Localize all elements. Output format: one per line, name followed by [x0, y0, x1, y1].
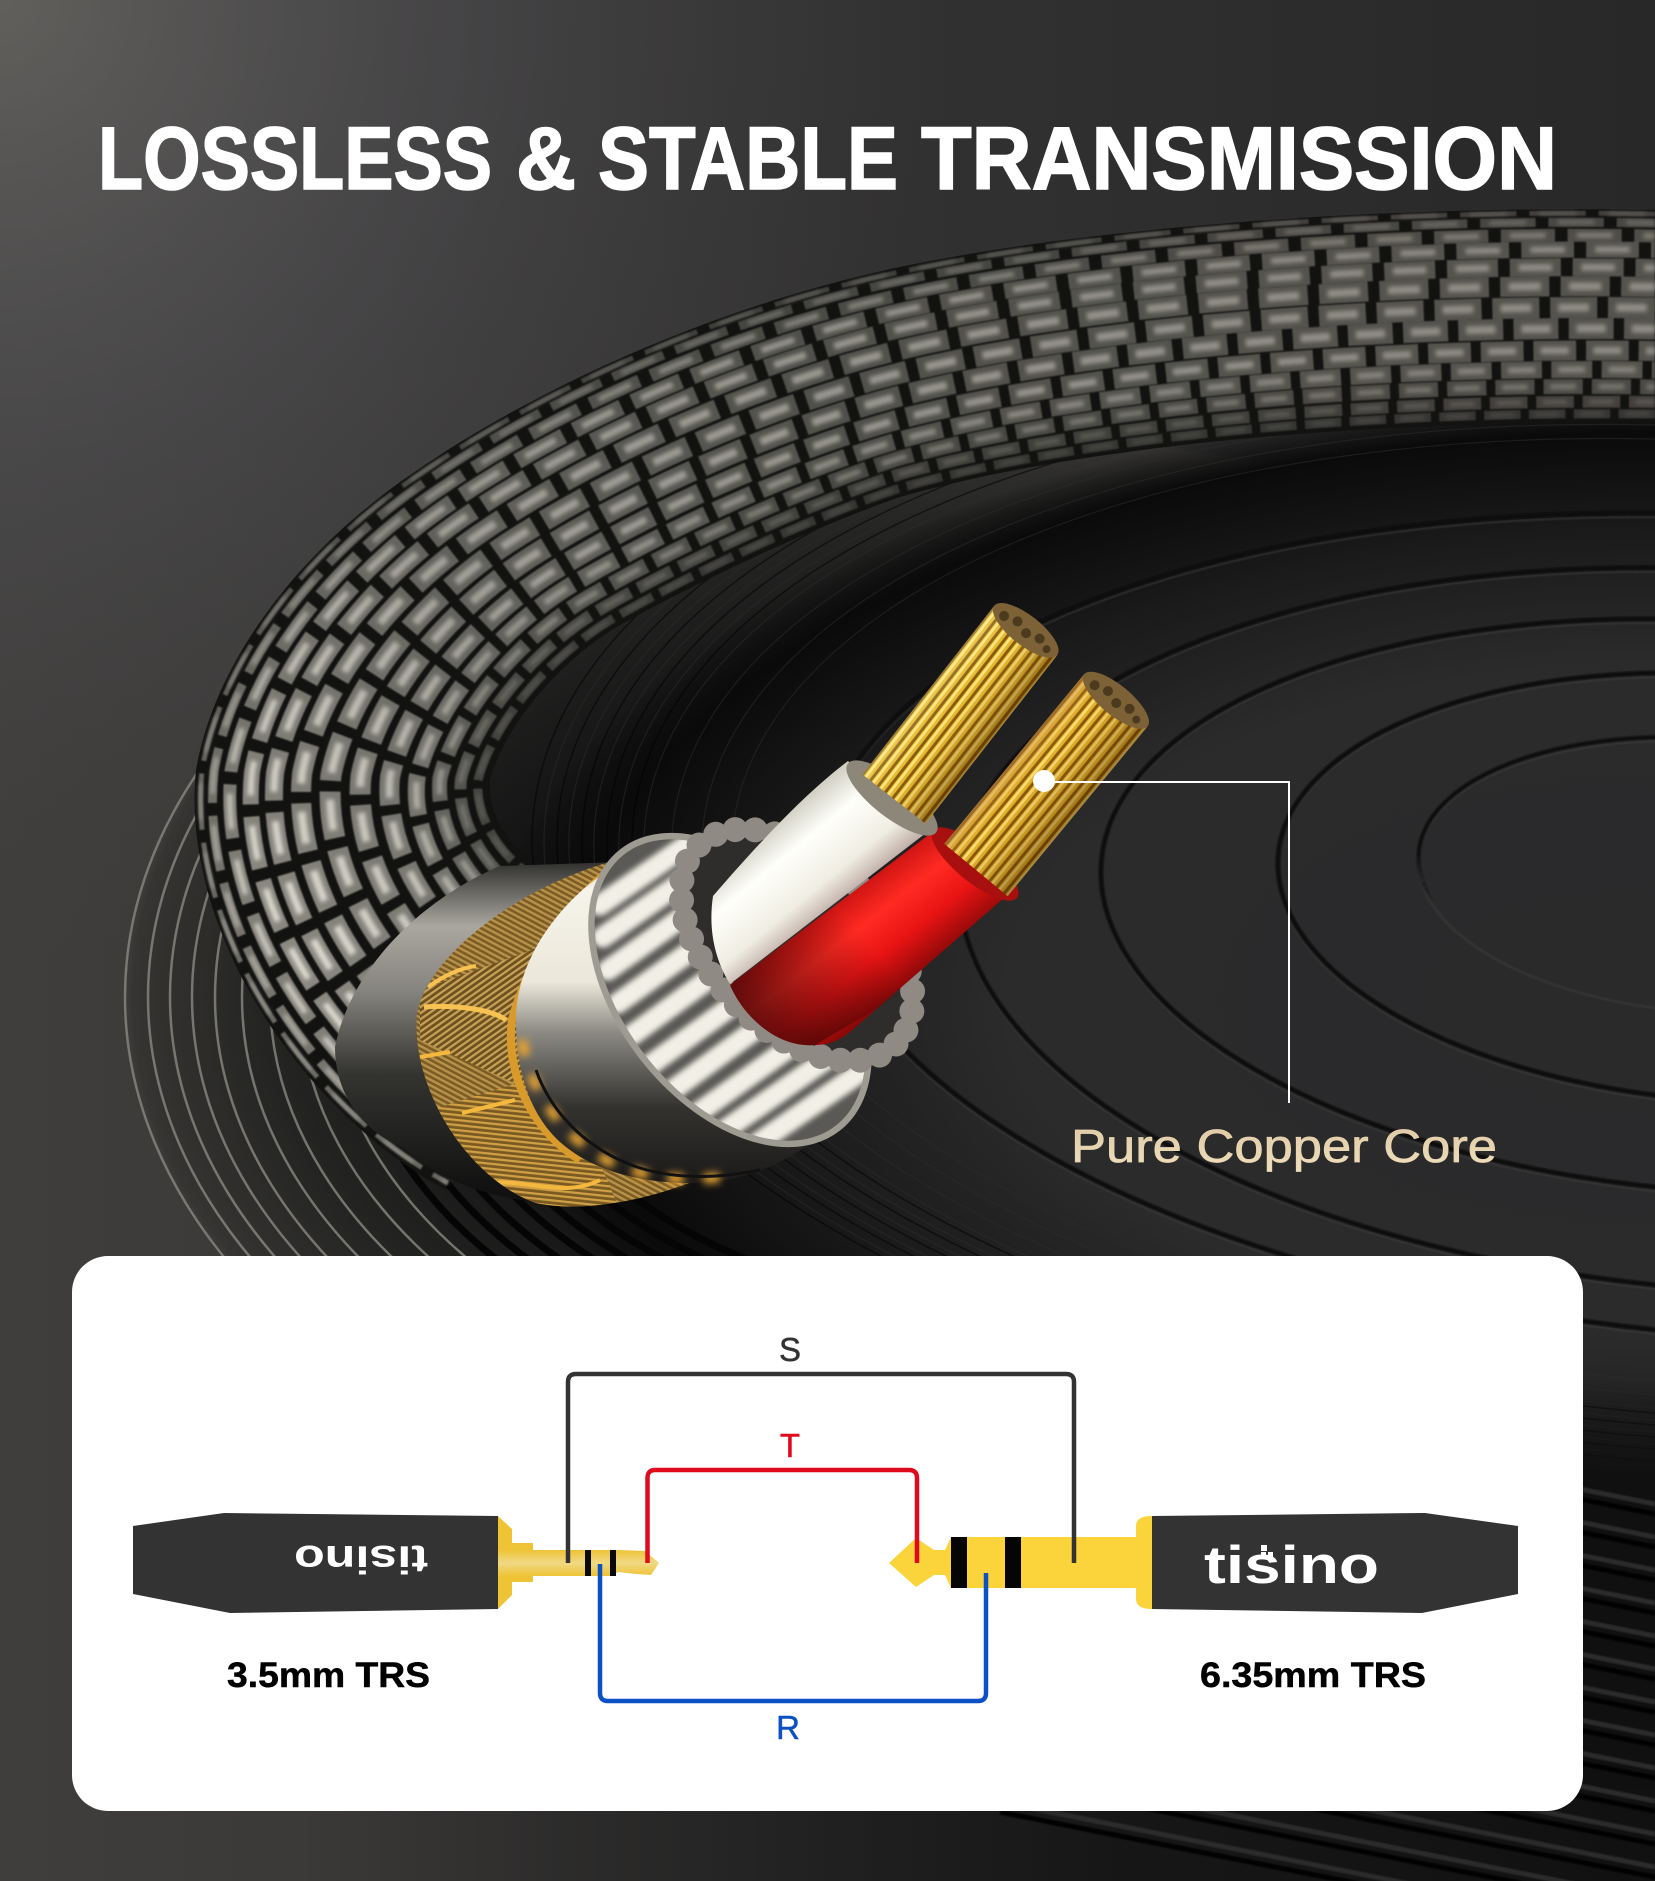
braid base	[195, 209, 1655, 1190]
6.35mm rings	[951, 1537, 1021, 1588]
6.35mm logo: tisino	[1204, 1536, 1379, 1595]
braid highlights	[201, 213, 1655, 1183]
copper core, white wire	[862, 594, 1067, 824]
copper core, red wire	[944, 663, 1157, 896]
panel: wiring diagram	[72, 1256, 1583, 1811]
3.5mm logo: tisino	[294, 1537, 428, 1580]
T label: T	[780, 1427, 800, 1464]
6.35mm metal shaft	[889, 1516, 1152, 1609]
braided cable	[195, 209, 1655, 1190]
3.5mm label: 3.5mm TRS	[227, 1656, 430, 1695]
3.5mm metal shaft	[498, 1516, 659, 1609]
lower left coil grooves	[124, 494, 1002, 1256]
logo pixel dots	[1261, 1545, 1273, 1557]
callout: pure copper core	[1033, 770, 1497, 1172]
6.35mm plug	[889, 1513, 1518, 1613]
silver cylinder	[516, 840, 862, 1183]
3.5mm body	[133, 1513, 498, 1613]
title	[98, 108, 1557, 208]
R wire	[600, 1564, 986, 1701]
3.5mm rings	[585, 1550, 616, 1576]
white wire	[711, 749, 948, 984]
cut rim	[536, 784, 924, 1196]
6.35mm label: 6.35mm TRS	[1200, 1656, 1426, 1695]
3.5mm plug	[133, 1513, 659, 1613]
R label: R	[776, 1709, 800, 1746]
silver groove line	[536, 1070, 760, 1176]
title: &	[516, 108, 576, 208]
red wire	[730, 816, 1028, 1045]
title: LOSSLESS	[98, 108, 492, 208]
cable cross-section connector	[335, 594, 1157, 1210]
title: STABLE	[598, 108, 898, 208]
title: TRANSMISSION	[921, 108, 1557, 208]
shielding bead ring	[638, 786, 956, 1104]
6.35mm body	[1152, 1513, 1518, 1613]
white filler strands	[594, 839, 864, 1141]
leader line	[1044, 782, 1289, 1103]
gold reflections on silver	[522, 1040, 730, 1179]
T wire	[648, 1470, 917, 1563]
gold engraved ring	[416, 862, 690, 1206]
black concentric disc	[352, 263, 1655, 1610]
dark area around lower edges	[300, 1380, 1655, 1881]
callout dot	[1033, 770, 1055, 792]
callout label: Pure Copper Core	[1071, 1120, 1497, 1172]
S label: S	[779, 1331, 801, 1368]
panel background	[72, 1256, 1583, 1811]
right corner coil grooves	[1000, 1373, 1655, 1881]
S wire	[568, 1374, 1074, 1563]
braid strands	[201, 213, 1655, 1183]
dark metal sleeve	[335, 860, 680, 1203]
